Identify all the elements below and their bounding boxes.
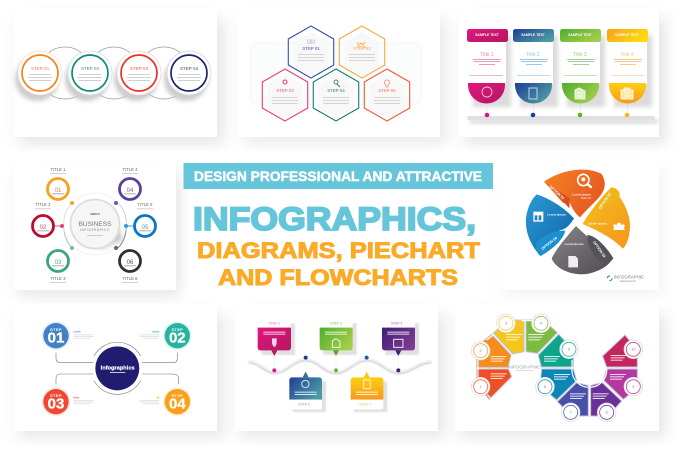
number badges: 2: [480, 348, 483, 353]
hexagon step 02: STEP 02: [353, 46, 371, 51]
node 01: [48, 167, 74, 205]
petal orange: Dolor sit: [581, 196, 591, 200]
step 04 circle: [164, 51, 211, 101]
number badges: [471, 314, 643, 422]
node 05: TITLE 5: [138, 202, 153, 207]
step 03 circle: STEP 03: [130, 66, 149, 71]
panel: step circles: [13, 9, 224, 144]
center disc: [64, 193, 126, 255]
step 02 badge: [139, 321, 192, 350]
number badges: 10: [631, 347, 636, 352]
step 04 badge: STEP: [171, 393, 183, 398]
card title 2: SAMPLE TEXT: [521, 33, 546, 37]
logo: INFOGRAPHIC: [614, 275, 644, 280]
step 2 box: [289, 356, 326, 412]
petal yellow: OPTION 02: [598, 192, 612, 210]
hub: [95, 346, 139, 390]
panel: wave step timeline: [235, 304, 445, 438]
step 1 box: STEP 1: [269, 322, 280, 326]
step 5 box: STEP 5: [391, 322, 402, 326]
segment 5: [538, 334, 573, 367]
title line: diagrams: DIAGRAMS, PIECHART: [197, 238, 480, 263]
step 01 badge: 01: [48, 330, 64, 347]
card title 2: [513, 29, 558, 117]
step 03 badge: Dolor: [73, 397, 79, 399]
node 01: TITLE 1: [51, 167, 66, 172]
petal blue: [526, 194, 574, 256]
connector arrows: [56, 342, 179, 394]
number badges: 4: [540, 321, 543, 326]
node 01: 01: [55, 188, 62, 194]
hexagon step 01: [288, 26, 334, 78]
hexagon step 05: [364, 69, 410, 121]
step 04 badge: [139, 387, 192, 416]
step 3 box: STEP 3: [330, 322, 342, 326]
node 02: [32, 202, 64, 236]
number badges: 3: [505, 321, 508, 326]
segment 7: [557, 383, 588, 416]
step 4 box: [351, 356, 387, 412]
step 02 badge: STEP: [171, 327, 183, 332]
petal orange: [544, 170, 605, 217]
logo: [607, 275, 644, 283]
number badges: 8: [606, 410, 609, 415]
timeline bar: [467, 116, 658, 124]
hexagon step 01: STEP 01: [302, 46, 320, 51]
card title 3: [560, 29, 605, 117]
panel: business infographic radial: [13, 162, 180, 296]
petal orange: OPTION 01: [548, 185, 565, 200]
node 06: [114, 246, 140, 283]
card title 1: [467, 29, 511, 117]
step 01 circle: STEP 01: [31, 66, 50, 71]
segment 2: [477, 334, 511, 367]
petal orange: Lorem Ipsum: [572, 192, 591, 196]
hub: Infographics: [101, 366, 135, 372]
step 02 badge: 02: [169, 330, 186, 347]
card title 4: Title 4: [620, 52, 634, 58]
step 02 circle: [65, 51, 112, 101]
node 04: 04: [127, 188, 134, 194]
petal blue: Lorem Ipsum: [547, 213, 566, 217]
step 4 box: STEP 4: [359, 403, 371, 407]
center label: INFOGRAPHIC: [508, 364, 541, 369]
hexagon step 04: STEP 04: [327, 88, 345, 93]
step 5 box: [382, 319, 419, 372]
node 06: TITLE 6: [123, 276, 138, 281]
white ring lines: [478, 321, 607, 398]
segment 1: [477, 369, 512, 399]
banner: [184, 163, 493, 189]
connecting arcs: [39, 47, 190, 99]
step 2 box: STEP 2: [298, 403, 310, 407]
number badges: 1: [480, 384, 483, 389]
node 02: TITLE 2: [36, 202, 51, 207]
segment 3: [493, 320, 524, 354]
step 02 circle: STEP 02: [81, 66, 100, 71]
title line: infographics: INFOGRAPHICS,: [193, 201, 476, 237]
petal blue: OPTION 04: [541, 235, 559, 251]
step 01 badge: [42, 321, 93, 350]
banner: DESIGN PROFESSIONAL AND ATTRACTIVE: [194, 168, 482, 184]
panel: pie petals: [497, 158, 663, 294]
petal gray: OPTION 03: [592, 240, 606, 258]
panel: ten step ring: [455, 304, 666, 438]
card title 2: Title 2: [526, 52, 540, 58]
node 05: [124, 202, 156, 236]
step 01 circle: [15, 51, 62, 101]
step 04 badge: Sit: [156, 396, 160, 399]
number badges: 9: [632, 384, 635, 389]
number badges: 6: [544, 384, 547, 389]
step 03 circle: [114, 51, 161, 101]
hexagon step 03: STEP 03: [276, 88, 294, 93]
number badges: 7: [570, 410, 573, 415]
node 04: TITLE 4: [123, 167, 138, 172]
step 03 badge: 03: [48, 396, 64, 413]
step 02 badge: Ipsum: [152, 332, 159, 334]
step 3 box: [320, 319, 357, 372]
segment 9: [603, 369, 637, 399]
petal yellow: Lorem Ipsum: [588, 222, 607, 226]
node 03: TITLE 3: [51, 276, 66, 281]
node 06: 06: [127, 260, 134, 266]
connector lines: [52, 203, 137, 248]
node 04: [114, 167, 140, 205]
hexagon step 03: [262, 69, 308, 121]
title line: flowcharts: AND FLOWCHARTS: [218, 265, 458, 290]
card title 4: [607, 29, 652, 117]
petal gray: Lorem Ipsum: [565, 242, 584, 246]
center disc: BUSINESS: [79, 221, 112, 228]
center disc: INFOGRAPHIC: [80, 228, 110, 232]
step 1 box: [258, 319, 295, 372]
segment 8: [591, 382, 622, 416]
center disc: ABOUT: [90, 212, 100, 216]
step 01 badge: Lorem: [73, 332, 80, 334]
node 03: 03: [55, 260, 62, 266]
card title 1: Title 1: [480, 52, 494, 58]
card title 3: Title 3: [573, 52, 587, 58]
segment 4: [526, 320, 557, 353]
step 04 badge: 04: [169, 396, 186, 413]
panel: four steps around hub: [13, 304, 224, 438]
panel: four title cards with timeline: [459, 9, 666, 144]
petal yellow: [583, 187, 630, 249]
hexagon step 04: [313, 69, 359, 121]
node 03: [48, 246, 74, 283]
main title: [193, 201, 480, 290]
segment 10: [603, 335, 637, 367]
step 01 badge: STEP: [50, 327, 62, 332]
petal gray: [552, 226, 613, 274]
card title 4: SAMPLE TEXT: [615, 33, 640, 37]
node 05: 05: [142, 225, 149, 231]
card title 3: SAMPLE TEXT: [568, 33, 593, 37]
segment 6: [540, 369, 577, 400]
hexagon step 05: STEP 05: [378, 88, 396, 93]
card title 1: SAMPLE TEXT: [475, 33, 500, 37]
node 02: 02: [40, 225, 47, 231]
hexagon step 02: [339, 26, 385, 78]
panel: hexagon steps: [238, 9, 447, 144]
logo: background: [620, 279, 636, 283]
wave line: [248, 359, 432, 373]
number badges: 5: [568, 347, 571, 352]
step 03 badge: [42, 387, 93, 416]
hexagon step 01: ▯▯▯: [307, 39, 315, 45]
step 04 circle: STEP 04: [180, 66, 199, 71]
step 03 badge: STEP: [50, 393, 62, 398]
